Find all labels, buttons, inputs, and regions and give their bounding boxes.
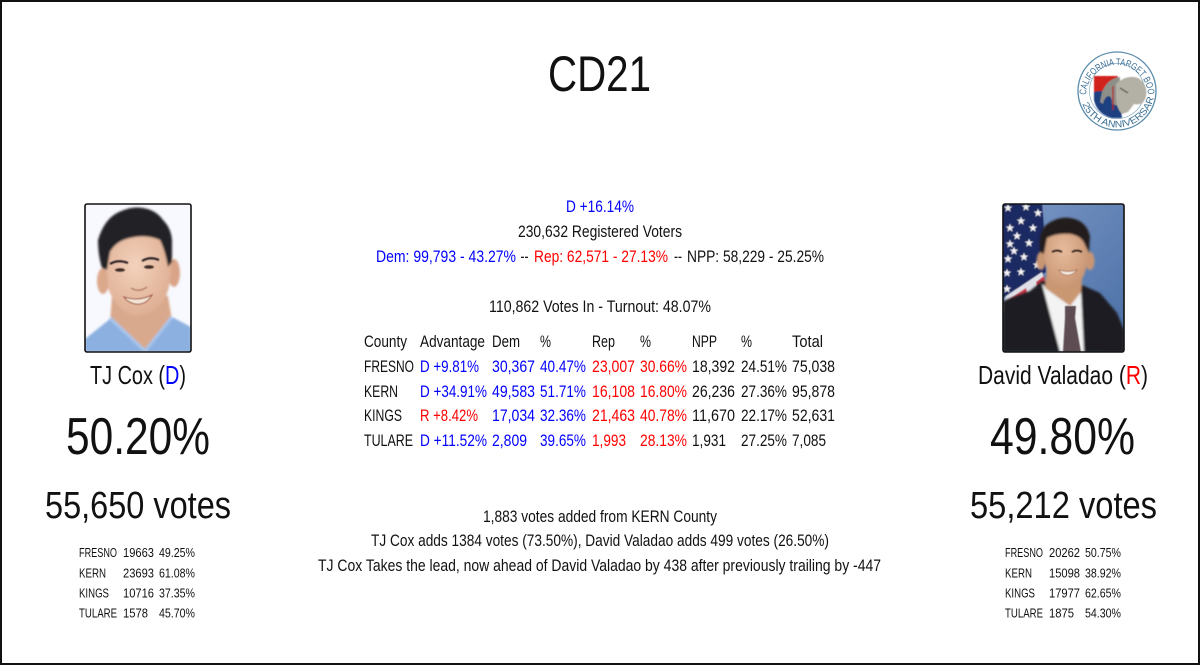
title: CD21 bbox=[548, 46, 651, 102]
county breakdown: Valadao: KINGS bbox=[1005, 586, 1035, 600]
tie bbox=[1063, 306, 1081, 352]
district summary: Rep: 62,571 - 27.13% bbox=[534, 248, 668, 266]
row: Fresno: 23,007 bbox=[592, 358, 635, 376]
county breakdown: Cox: TULARE bbox=[79, 606, 117, 620]
row: Tulare bbox=[364, 432, 826, 450]
county breakdown: Cox: 49.25% bbox=[159, 545, 195, 560]
county breakdown: Valadao: 15098 bbox=[1049, 566, 1080, 580]
county breakdown: Valadao: TULARE bbox=[1005, 606, 1043, 620]
district summary: D +16.14% bbox=[566, 198, 634, 216]
candidate votes: Valadao: 55,212 votes bbox=[970, 485, 1157, 527]
row: Kings: 40.78% bbox=[640, 407, 687, 425]
neck bbox=[110, 296, 172, 351]
row: Kings: 11,670 bbox=[692, 407, 735, 425]
suit bbox=[1003, 281, 1124, 352]
district summary: Dem: 99,793 - 43.27% bbox=[376, 248, 516, 266]
county breakdown: Cox: KERN bbox=[79, 566, 106, 580]
county breakdown: Cox: FRESNO bbox=[79, 545, 117, 560]
county breakdown: Valadao: 62.65% bbox=[1085, 586, 1121, 600]
row: Kern: KERN bbox=[364, 383, 398, 401]
row: Kings: 32.36% bbox=[540, 407, 586, 425]
candidate name: David Valadao: David Valadao (R) bbox=[978, 360, 1148, 390]
county breakdown: Cox: 45.70% bbox=[159, 606, 195, 620]
row: Kern: 27.36% bbox=[741, 383, 787, 401]
county breakdown: Valadao: 20262 bbox=[1049, 545, 1080, 560]
shirt bbox=[85, 317, 191, 352]
row: Tulare: 1,993 bbox=[592, 432, 626, 450]
table header bbox=[364, 333, 823, 351]
hair bbox=[1040, 218, 1090, 254]
row: Kings: 52,631 bbox=[792, 407, 835, 425]
eyes bbox=[1052, 250, 1082, 252]
latest update note: TJ Cox Takes the lead, now ahead of David Valadao by 438 after previously trailing by -447 bbox=[318, 557, 881, 575]
county breakdown: Valadao: 54.30% bbox=[1085, 606, 1121, 620]
row: Tulare: 27.25% bbox=[741, 432, 787, 450]
row: Kern: 49,583 bbox=[492, 383, 535, 401]
district summary: 230,632 Registered Voters bbox=[518, 223, 682, 241]
row: Fresno: 30.66% bbox=[640, 358, 687, 376]
row: Kern: D +34.91% bbox=[420, 383, 487, 401]
county breakdown: Cox: 19663 bbox=[123, 545, 154, 560]
table header: Advantage bbox=[420, 333, 485, 351]
district summary: 110,862 Votes In - Turnout: 48.07% bbox=[489, 298, 711, 316]
row: Kings: R +8.42% bbox=[420, 407, 478, 425]
candidate votes: Cox: 55,650 votes bbox=[45, 485, 231, 527]
row: Kern: 26,236 bbox=[692, 383, 735, 401]
hair bbox=[98, 208, 172, 270]
county breakdown: Cox: 10716 bbox=[123, 586, 154, 600]
county breakdown: Cox: 1578 bbox=[123, 606, 148, 620]
district summary: -- bbox=[520, 248, 528, 266]
nose bbox=[131, 287, 147, 290]
row: Fresno: 30,367 bbox=[492, 358, 535, 376]
row: Kings: KINGS bbox=[364, 407, 402, 425]
table header: Total bbox=[792, 333, 823, 351]
row: Kern bbox=[364, 383, 835, 401]
mouth bbox=[1059, 270, 1077, 275]
row: Fresno: 24.51% bbox=[741, 358, 787, 376]
eyes bbox=[115, 268, 125, 272]
row: Fresno: D +9.81% bbox=[420, 358, 479, 376]
ears bbox=[1036, 252, 1046, 270]
row: Fresno bbox=[364, 358, 835, 376]
row: Tulare: D +11.52% bbox=[420, 432, 487, 450]
county breakdown: Valadao: 50.75% bbox=[1085, 545, 1121, 560]
flag bbox=[1003, 204, 1046, 298]
latest update note: 1,883 votes added from KERN County bbox=[483, 508, 718, 526]
county results table bbox=[364, 333, 835, 450]
county breakdown: Valadao: 1875 bbox=[1049, 606, 1074, 620]
district summary: NPP: 58,229 - 25.25% bbox=[687, 248, 824, 266]
row: Fresno: 40.47% bbox=[540, 358, 586, 376]
logo: California Target Book 25th anniversary seal bbox=[1077, 51, 1157, 131]
row: Fresno: 18,392 bbox=[692, 358, 735, 376]
table header: Dem bbox=[492, 333, 520, 351]
county breakdown: Valadao: KERN bbox=[1005, 566, 1032, 580]
candidate share: Cox: 50.20% bbox=[66, 408, 210, 466]
row: Kings: 21,463 bbox=[592, 407, 635, 425]
row: Kern: 95,878 bbox=[792, 383, 835, 401]
candidate name: TJ Cox: TJ Cox (D) bbox=[90, 360, 186, 390]
county breakdown: Cox: KINGS bbox=[79, 586, 109, 600]
row: Fresno: FRESNO bbox=[364, 358, 414, 376]
row: Tulare: 28.13% bbox=[640, 432, 687, 450]
candidate share: Valadao: 49.80% bbox=[990, 408, 1135, 466]
row: Kings: 17,034 bbox=[492, 407, 535, 425]
row: Kings: 22.17% bbox=[741, 407, 787, 425]
county breakdown: Cox: 23693 bbox=[123, 566, 154, 580]
row: Tulare: 2,809 bbox=[492, 432, 527, 450]
row: Kern: 16.80% bbox=[640, 383, 687, 401]
row: Fresno: 75,038 bbox=[792, 358, 835, 376]
county breakdown: Cox bbox=[79, 545, 195, 620]
table header: % bbox=[540, 333, 551, 351]
county breakdown: Cox: 61.08% bbox=[159, 566, 195, 580]
neck bbox=[1045, 268, 1083, 306]
row: Kern: 16,108 bbox=[592, 383, 635, 401]
row: Kings bbox=[364, 407, 835, 425]
table header: County bbox=[364, 333, 408, 351]
brows bbox=[110, 258, 159, 264]
county breakdown: Valadao bbox=[1005, 545, 1121, 620]
row: Tulare: 7,085 bbox=[792, 432, 826, 450]
county breakdown: Valadao: FRESNO bbox=[1005, 545, 1043, 560]
row: Tulare: 1,931 bbox=[692, 432, 726, 450]
row: Kern: 51.71% bbox=[540, 383, 586, 401]
district summary: -- bbox=[674, 248, 682, 266]
shirt bbox=[1042, 284, 1084, 352]
face bbox=[106, 232, 171, 316]
ears bbox=[97, 268, 109, 294]
collar bbox=[110, 317, 172, 351]
table header: % bbox=[741, 333, 752, 351]
table header: Rep bbox=[592, 333, 615, 351]
latest update note bbox=[318, 508, 881, 575]
table header: % bbox=[640, 333, 651, 351]
face bbox=[1042, 232, 1090, 282]
candidate photo: TJ Cox bbox=[85, 204, 191, 352]
district summary bbox=[376, 198, 824, 316]
table header: NPP bbox=[692, 333, 717, 351]
latest update note: TJ Cox adds 1384 votes (73.50%), David Valadao adds 499 votes (26.50%) bbox=[371, 532, 829, 550]
row: Tulare: 39.65% bbox=[540, 432, 586, 450]
candidate photo: David Valadao bbox=[1003, 203, 1124, 352]
county breakdown: Valadao: 38.92% bbox=[1085, 566, 1121, 580]
county breakdown: Valadao: 17977 bbox=[1049, 586, 1080, 600]
row: Tulare: TULARE bbox=[364, 432, 413, 450]
county breakdown: Cox: 37.35% bbox=[159, 586, 195, 600]
mouth bbox=[124, 295, 152, 304]
